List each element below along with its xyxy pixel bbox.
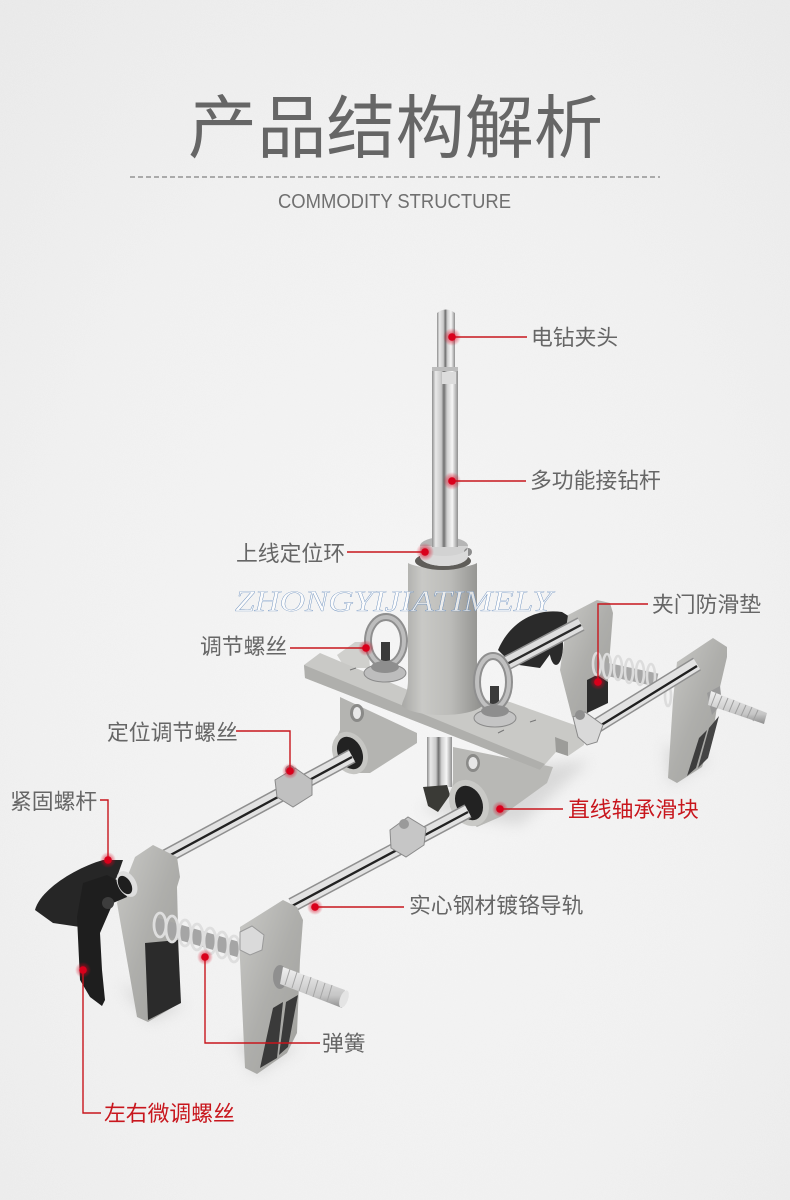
callout: 实心钢材镀铬导轨 (307, 893, 584, 918)
front rail stop collar (390, 817, 426, 857)
subtitle: COMMODITY STRUCTURE (278, 191, 511, 213)
left threaded bolt (273, 965, 351, 1009)
left back clamp (117, 845, 181, 1022)
rear rail stop collar (275, 765, 312, 807)
callout: 多功能接钻杆 (443, 468, 661, 493)
product: door lock mortiser jig (35, 310, 767, 1076)
right threaded bolt (708, 691, 767, 724)
callout: 紧固螺杆 (10, 789, 116, 868)
callout: 定位调节螺丝 (107, 720, 298, 779)
right back clamp (549, 600, 613, 717)
callout: 上线定位环 (236, 541, 434, 566)
callout: 电钻夹头 (443, 325, 618, 350)
callout: 多功能接钻杆: 多功能接钻杆 (530, 468, 661, 493)
callout: 紧固螺杆: 紧固螺杆 (10, 789, 97, 814)
left eye bolt (364, 617, 406, 682)
left front clamp (240, 900, 303, 1074)
mounting plate (304, 653, 584, 770)
watermark: ZHONGYIJIATIMELY (235, 585, 556, 618)
callout: 定位调节螺丝: 定位调节螺丝 (107, 720, 238, 745)
right front rail (585, 664, 697, 733)
rear left rail (165, 756, 352, 858)
callout: 实心钢材镀铬导轨: 实心钢材镀铬导轨 (409, 893, 584, 918)
callout: 电钻夹头: 电钻夹头 (531, 325, 618, 350)
right back handle (498, 611, 575, 668)
drill shaft (432, 310, 458, 547)
positioning ring (415, 537, 472, 570)
callout: 调节螺丝 (200, 634, 374, 659)
main cylinder (402, 563, 482, 715)
callout: 左右微调螺丝 (75, 962, 235, 1126)
callout: 直线轴承滑块: 直线轴承滑块 (568, 797, 699, 822)
right back rail (505, 624, 581, 665)
soft floor shadows (120, 745, 710, 1076)
callout: 夹门防滑垫 (590, 592, 761, 690)
right bearing block (442, 747, 553, 833)
callout: 弹簧 (197, 949, 366, 1056)
left spring (154, 913, 240, 962)
callout: 直线轴承滑块 (492, 797, 699, 822)
right rail stop collar (573, 710, 603, 745)
black handle disc (35, 860, 123, 927)
cutter shaft below plate (423, 737, 452, 812)
callout: 上线定位环: 上线定位环 (236, 541, 345, 566)
callout: 弹簧: 弹簧 (322, 1031, 366, 1056)
title: 产品结构解析 (188, 90, 603, 167)
right front clamp (668, 638, 727, 783)
callout: 左右微调螺丝: 左右微调螺丝 (104, 1101, 235, 1126)
callout: 调节螺丝: 调节螺丝 (200, 634, 287, 659)
right eye bolt (474, 656, 516, 727)
quick release lever (77, 867, 142, 1006)
callout: 夹门防滑垫: 夹门防滑垫 (652, 592, 761, 617)
front rail (292, 811, 468, 906)
ring front band (420, 547, 468, 566)
right spring (593, 653, 671, 706)
left back bearing block (325, 642, 417, 780)
